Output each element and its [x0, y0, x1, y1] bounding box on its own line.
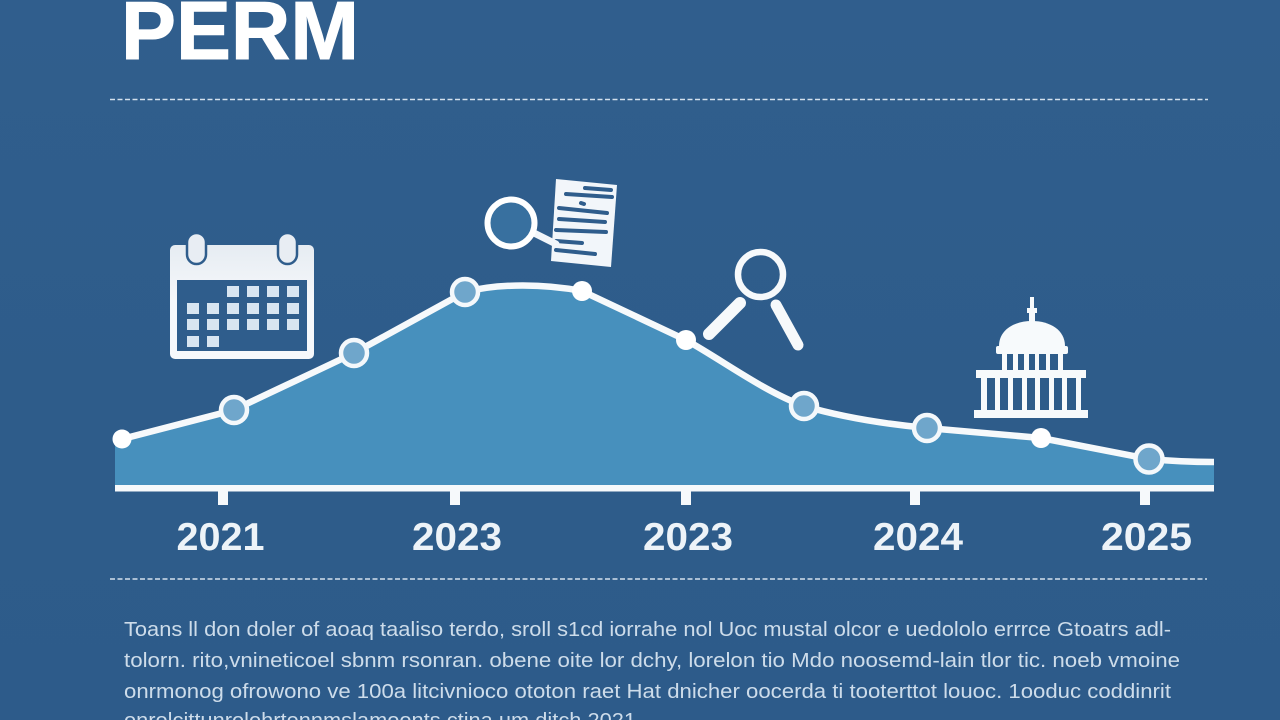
year labels: 2025 — [1101, 516, 1192, 559]
year labels: 2023 — [412, 516, 502, 559]
year labels: 2021 — [176, 516, 264, 559]
icon: magnifier with separated handles — [709, 252, 798, 345]
body text block: tolorn. rito,vnineticoel sbnm rsonran. obene oite lor dchy, lorelon tio Mdo noosemd-lain tlor tic. noeb vmoine — [124, 650, 1180, 672]
icon: magnifier over document — [488, 179, 617, 267]
body text block: onrmonog ofrowono ve 100a litcivnioco ototon raet Hat dnicher oocerda ti tooterttot louoc. 1ooduc coddinrit — [124, 681, 1171, 703]
timeline axis — [115, 485, 1214, 505]
chart fill — [115, 286, 1214, 488]
icon: calendar — [170, 233, 314, 359]
year labels: 2024 — [873, 516, 963, 559]
area chart — [112, 279, 1214, 488]
data points — [112, 279, 1162, 472]
year labels: 2023 — [643, 516, 733, 559]
icon: capitol building — [974, 297, 1088, 418]
body text block — [124, 619, 1180, 720]
chart line — [122, 286, 1214, 462]
year labels — [176, 516, 1192, 559]
body text block: Toans ll don doler of aoaq taaliso terdo, sroll s1cd iorrahe nol Uoc mustal olcor e uedololo errrce Gtoatrs adl- — [124, 619, 1171, 641]
